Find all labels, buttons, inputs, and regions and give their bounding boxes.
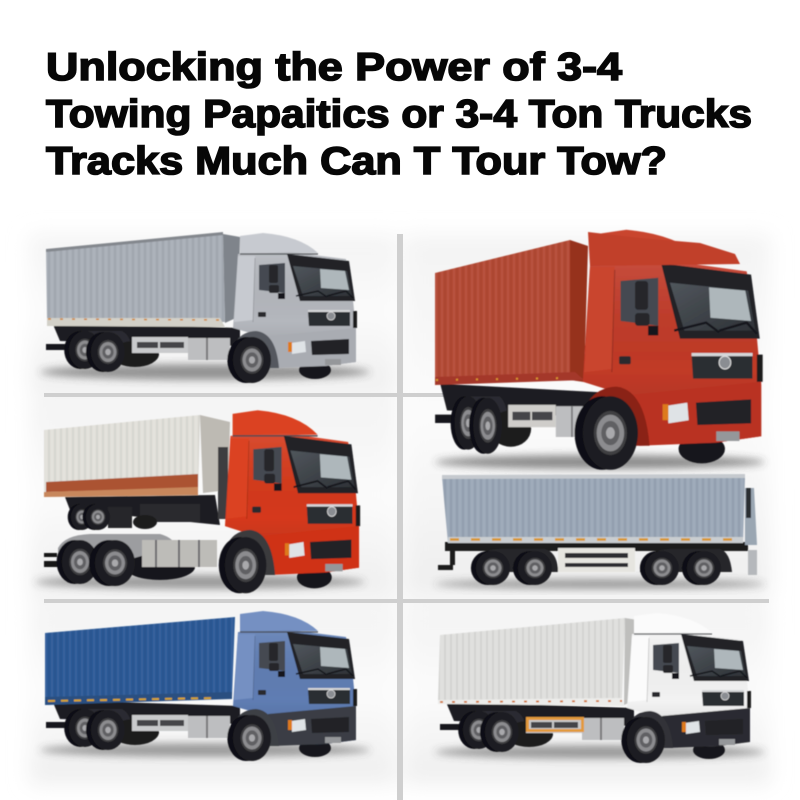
side guard: orange frame xyxy=(526,717,584,732)
cargo box: white xyxy=(438,618,644,706)
title: Tracks Much Can T Tour Tow? xyxy=(46,140,667,183)
upper hanging axle xyxy=(65,495,220,530)
truck: dark blue container truck xyxy=(40,611,370,761)
truck: silver grey container truck xyxy=(40,232,370,383)
photo grid panels xyxy=(30,235,770,784)
cargo box: grey-blue xyxy=(442,474,745,543)
title: Towing Papaitics or 3-4 Ton Trucks xyxy=(46,93,752,136)
truck: side view grey-blue container truck xyxy=(435,474,765,589)
cargo box: blue xyxy=(45,617,235,705)
cab roof: red xyxy=(588,232,740,266)
cab edge xyxy=(745,488,757,575)
grid dividers xyxy=(44,234,769,800)
truck: white box with red tractor xyxy=(35,410,365,593)
cargo box: grey xyxy=(46,232,240,327)
chassis xyxy=(438,542,748,583)
cargo box: white with red band xyxy=(44,415,230,519)
cargo box: red xyxy=(435,240,588,385)
title: Unlocking the Power of 3-4 xyxy=(46,46,622,89)
truck: large red container truck xyxy=(435,230,765,470)
title xyxy=(46,46,752,183)
truck: white container truck xyxy=(435,613,765,763)
lower tractor chassis xyxy=(44,534,217,586)
wheels xyxy=(471,551,721,585)
